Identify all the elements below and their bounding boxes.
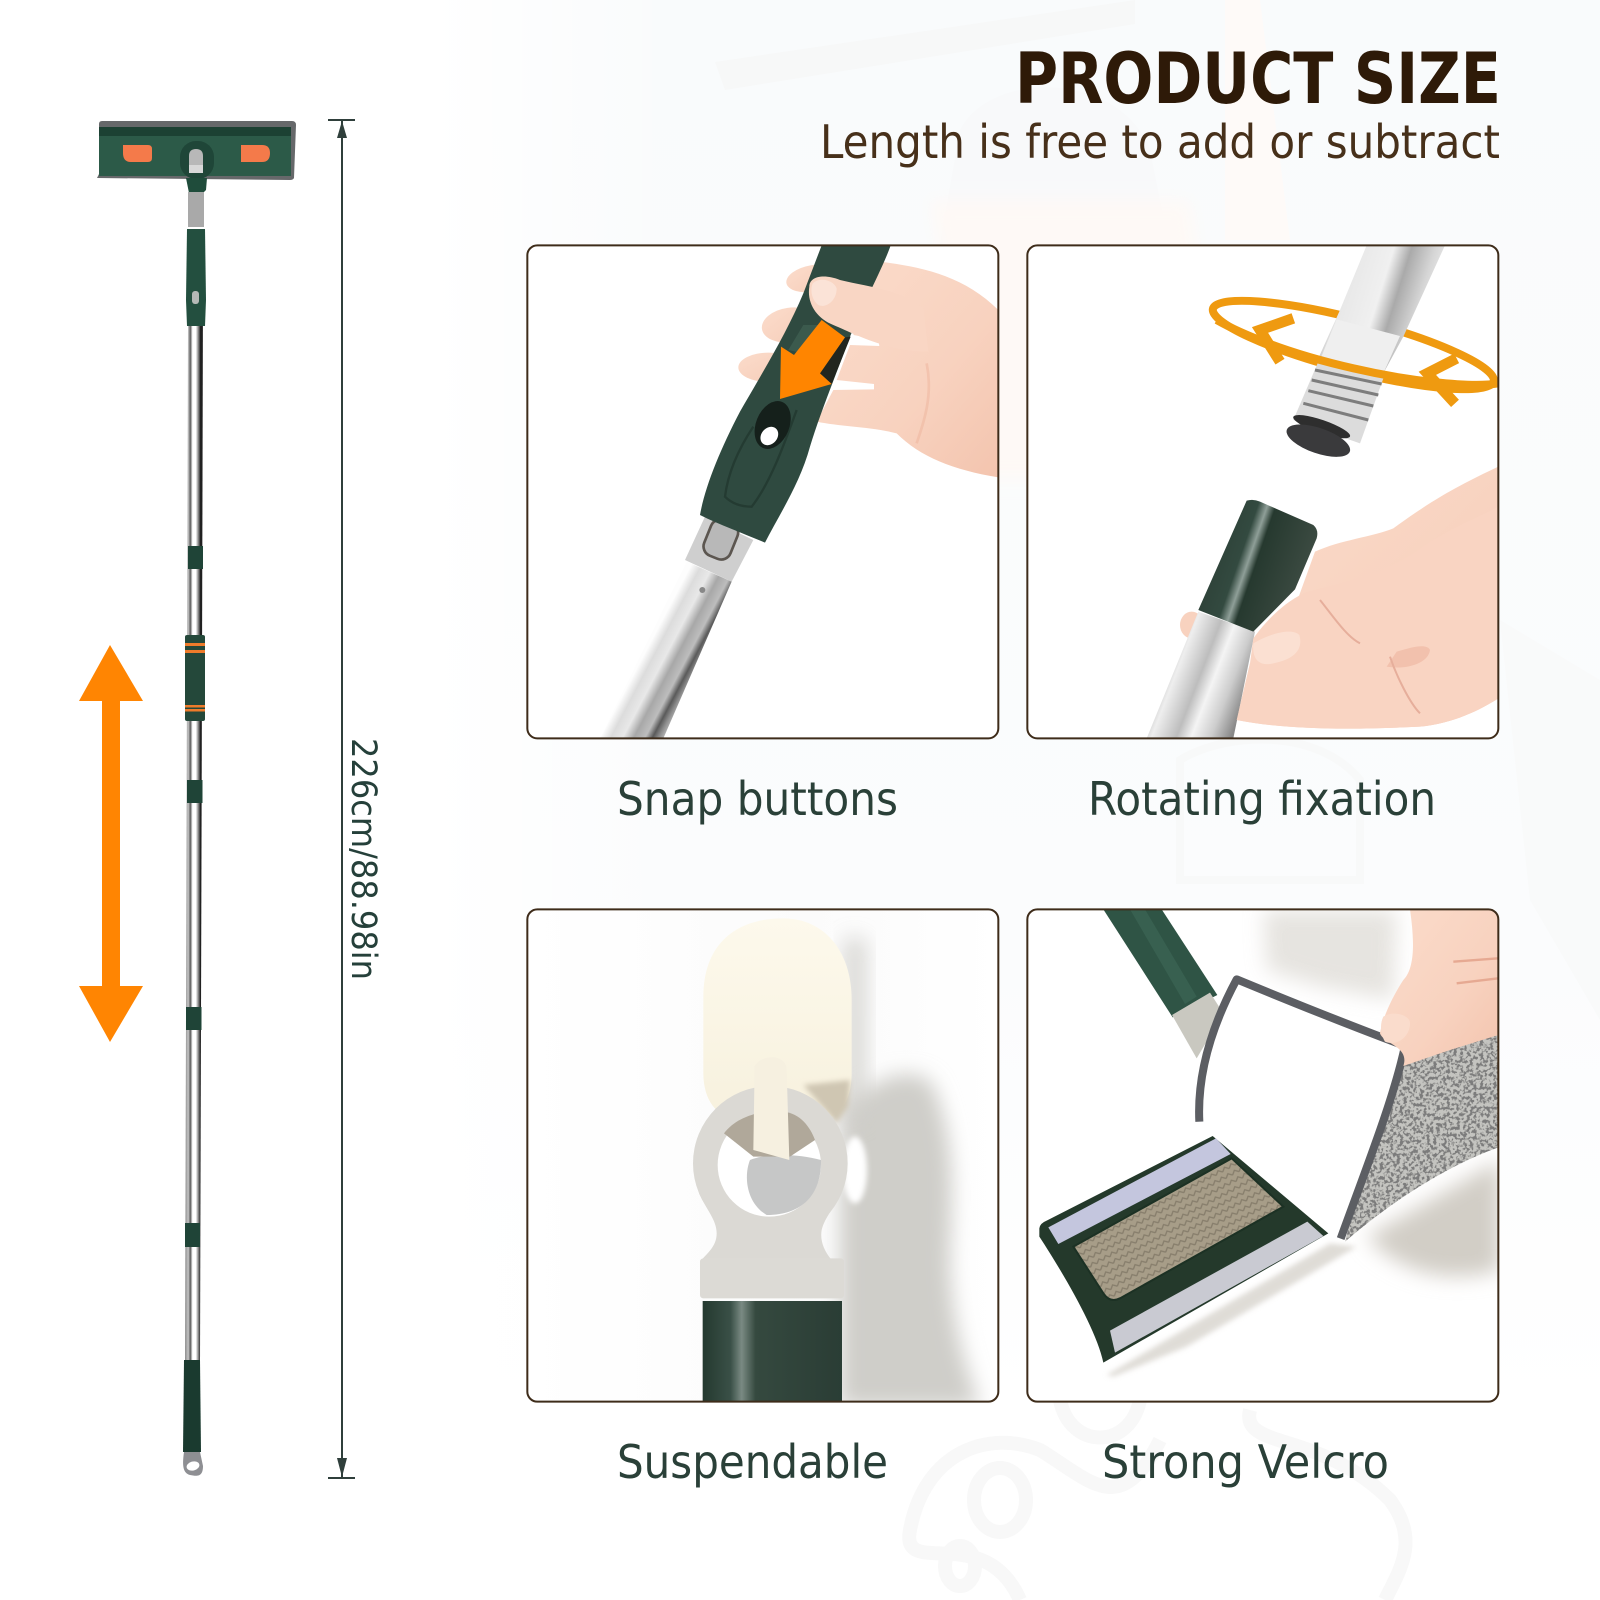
dimension line [328,120,355,1478]
thumb and front fingers [1236,585,1498,729]
caption: Suspendable [617,1435,888,1489]
adhesive hook plate [703,918,852,1120]
folded white velcro pad [1370,1059,1398,1145]
subtitle: Length is free to add or subtract [820,115,1500,169]
finger tip behind tube [1180,612,1198,638]
panel: suspendable photo [527,909,998,1407]
fingers [1380,909,1498,1066]
metal brush strip [1073,1158,1283,1300]
title: PRODUCT SIZE [1015,38,1501,120]
pole joints [185,546,203,1247]
orange-striped grip sleeve [185,635,205,721]
front rotation ring and chevrons [1217,318,1498,403]
dimension label: 226cm/88.98in [343,738,383,980]
threaded rod [1286,364,1384,457]
upper handle and connector [186,178,207,326]
panel: snap buttons photo [527,245,998,738]
grey connector [1172,993,1223,1058]
hand behind handle [738,260,998,477]
lower grip [183,1360,201,1452]
metal tube [600,562,732,738]
grey pad binding [1199,979,1405,1239]
hand behind cap [1237,467,1498,729]
dark green cap [1198,500,1317,632]
orange push arrow [780,320,851,399]
panel: rotating fixation photo [1027,245,1500,738]
lower metal tube [1147,612,1255,738]
caption: Rotating fixation [1088,772,1436,826]
hanging ring [693,1086,848,1260]
microfibre pad [1345,1035,1498,1242]
hanging ring [183,1452,203,1476]
green handle [1103,909,1217,1017]
rear rotation ring [1208,296,1498,394]
full product illustration: telescopic squeegee mop [97,121,296,1476]
grey collar [700,1258,844,1298]
caption: Snap buttons [617,772,898,826]
panel: strong velcro photo [1027,909,1500,1402]
telescopic pole tube [185,326,203,1362]
green handle [700,245,891,543]
squeegee base [1039,1136,1328,1363]
infographic canvas [79,50,1500,1488]
wall shadow [840,937,980,1407]
mop head [97,121,296,180]
caption: Strong Velcro [1102,1435,1389,1489]
photo shadows [1107,910,1500,1377]
green grip [703,1301,842,1402]
velcro strips [1048,1138,1323,1353]
hook tongue [753,1086,790,1160]
thumb [808,276,879,344]
metal collar [685,517,753,582]
upper metal tube [1318,245,1445,373]
orange double-headed adjust arrow [79,645,143,1042]
button hole [754,401,791,449]
